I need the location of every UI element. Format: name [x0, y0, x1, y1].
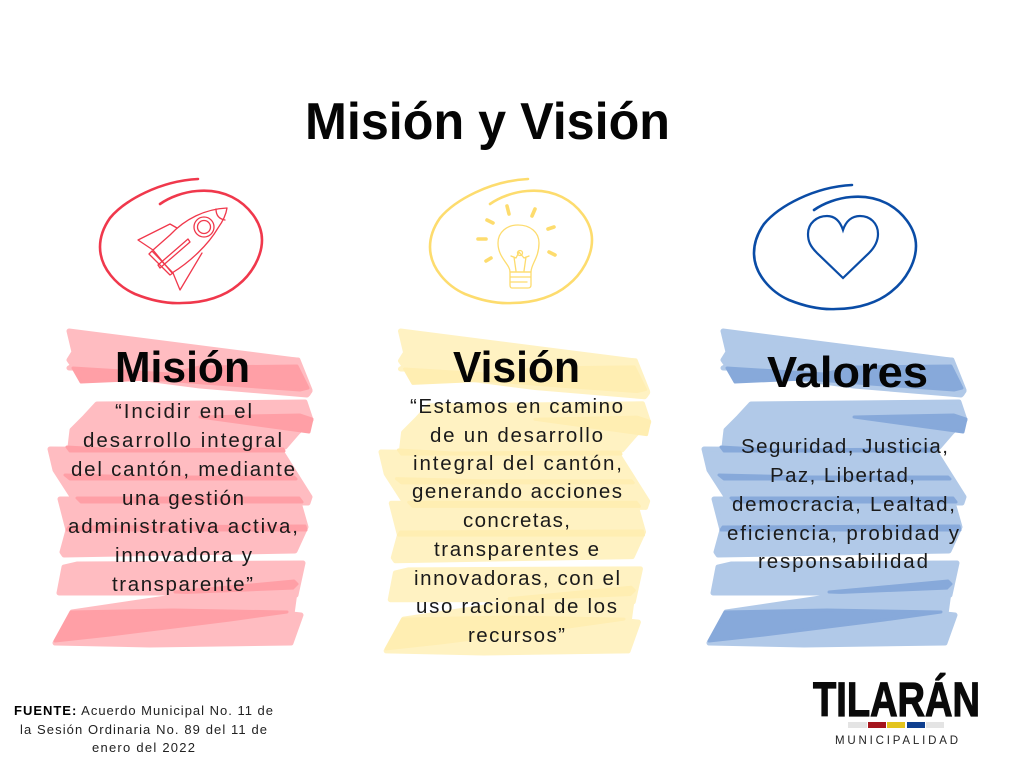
- text block: visión: recursos”: [468, 624, 565, 647]
- text block: misión: “Incidir en el: [115, 400, 252, 423]
- text block: valores: Paz, Libertad,: [770, 464, 915, 487]
- source note: [14, 703, 273, 755]
- text block: visión: de un desarrollo: [430, 424, 603, 447]
- text block: misión: administrativa activa,: [68, 515, 298, 538]
- icon: light bulb in scribbled circle: [430, 179, 592, 303]
- panel: valores: [704, 185, 966, 645]
- scribble background: visión: [381, 331, 650, 653]
- icon: heart in scribbled circle: [754, 185, 916, 309]
- icon: rocket in scribbled circle: [100, 179, 262, 303]
- source note: FUENTE: Acuerdo Municipal No. 11 de: [14, 703, 273, 718]
- text block: visión: transparentes e: [434, 538, 599, 561]
- text block: visión: “Estamos en camino: [410, 395, 623, 418]
- text block: valores: [727, 435, 960, 573]
- text block: valores: eficiencia, probidad y: [727, 522, 960, 545]
- text block: visión: [410, 395, 623, 647]
- title: Misión y Visión: [305, 93, 670, 151]
- text block: valores: democracia, Lealtad,: [732, 493, 955, 516]
- panel: visión: [381, 179, 650, 653]
- text block: misión: innovadora y: [115, 544, 253, 567]
- text block: misión: del cantón, mediante: [71, 458, 295, 481]
- text block: misión: transparente”: [112, 573, 253, 596]
- source note: la Sesión Ordinaria No. 89 del 11 de: [20, 722, 267, 737]
- logo: Tilarán Municipalidad: MUNICIPALIDAD: [835, 735, 958, 747]
- text block: visión: integral del cantón,: [413, 452, 622, 475]
- logo: Tilarán Municipalidad: TILARÁN: [813, 673, 980, 727]
- text block: misión: desarrollo integral: [83, 429, 282, 452]
- text block: misión: [68, 400, 298, 596]
- text block: visión: uso racional de los: [416, 595, 617, 618]
- text block: visión: concretas,: [463, 509, 570, 532]
- text block: visión: generando acciones: [412, 480, 622, 503]
- heading: Valores: Valores: [767, 348, 928, 397]
- scribble background: valores: [704, 331, 966, 645]
- panel: misión: [50, 179, 312, 645]
- source note: enero del 2022: [92, 740, 195, 755]
- heading: Visión: Visión: [453, 343, 580, 392]
- logo: Tilarán Municipalidad: [813, 673, 980, 747]
- text block: visión: innovadoras, con el: [414, 567, 620, 590]
- text block: valores: Seguridad, Justicia,: [741, 435, 948, 458]
- scribble background: misión: [50, 331, 312, 645]
- heading: Misión: Misión: [115, 343, 250, 392]
- text block: misión: una gestión: [122, 487, 244, 510]
- text block: valores: responsabilidad: [758, 550, 928, 573]
